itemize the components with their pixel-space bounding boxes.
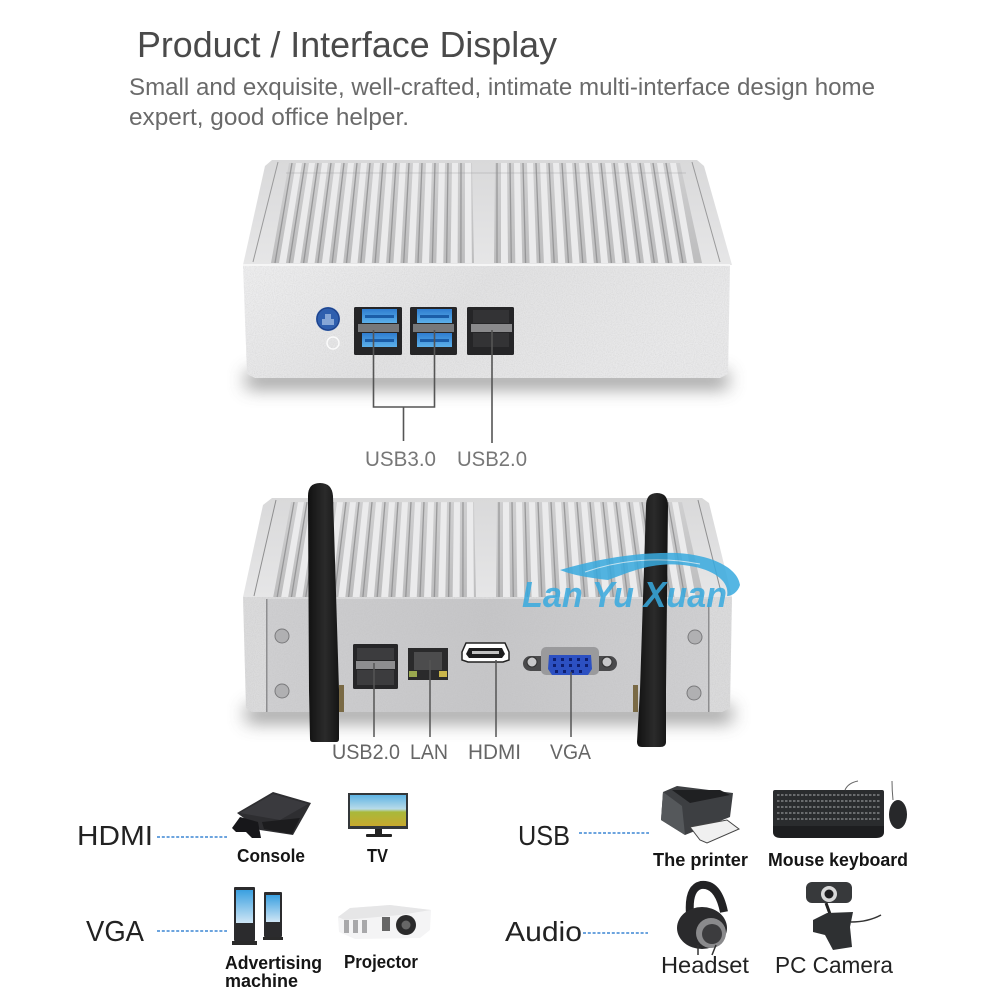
label: Projector: Projector — [344, 952, 418, 972]
icon: printer — [661, 786, 739, 843]
top heat-sink surface — [243, 498, 732, 598]
heading: Audio: Audio — [505, 916, 582, 947]
title: Product / Interface Display — [137, 24, 557, 65]
USB2.0 leader line — [491, 330, 493, 443]
label: Advertising machine: machine — [225, 971, 298, 991]
panel: USB devices — [518, 781, 908, 870]
panel: front view of mini PC — [243, 160, 733, 471]
USB 3.0 port stack B — [410, 307, 457, 355]
LAN port — [408, 648, 448, 680]
VGA port — [523, 647, 617, 675]
panel screws — [275, 629, 702, 700]
icon: game console — [232, 792, 311, 838]
dotted connector — [157, 836, 227, 838]
left antenna — [308, 483, 344, 742]
label: Mouse keyboard: Mouse keyboard — [768, 850, 908, 870]
heading: HDMI: HDMI — [77, 820, 153, 851]
label: VGA: VGA — [550, 741, 591, 764]
USB 2.0 port stack — [353, 644, 398, 689]
USB 2.0 port stack — [467, 307, 514, 355]
right antenna — [633, 493, 668, 747]
rear panel — [243, 597, 733, 713]
label: Advertising machine: Advertising — [225, 953, 322, 973]
subtitle text block: Small and exquisite, well-crafted, intimate multi-interface design home — [129, 74, 875, 101]
dotted connector — [579, 832, 649, 834]
front face — [243, 264, 733, 379]
icon: advertising machines — [232, 887, 283, 945]
dotted connector — [583, 932, 648, 934]
icon: projector — [338, 905, 431, 939]
panel: rear view of mini PC — [243, 483, 740, 764]
panel: Audio devices — [505, 882, 893, 978]
heading: VGA: VGA — [86, 916, 145, 948]
label: Advertising machine — [225, 953, 322, 991]
device shadow — [246, 706, 732, 722]
icon: headset — [677, 885, 727, 955]
label: Console: Console — [237, 846, 305, 866]
label: HDMI: HDMI — [468, 741, 521, 764]
dotted connector — [157, 930, 227, 932]
icon: keyboard and mouse — [773, 781, 907, 838]
leader lines to rear ports — [374, 660, 571, 737]
icon: PC camera — [806, 882, 881, 950]
panel: VGA devices — [86, 887, 431, 991]
heading: USB: USB — [518, 820, 570, 851]
top heat-sink surface — [243, 160, 732, 265]
USB 3.0 port stack A — [354, 307, 402, 355]
watermark logo — [522, 553, 740, 615]
label: USB2.0: USB2.0 — [457, 448, 527, 471]
HDMI port — [462, 643, 509, 662]
label: PC Camera: PC Camera — [775, 952, 893, 978]
device shadow — [246, 372, 728, 388]
label: USB2.0: USB2.0 — [332, 741, 400, 764]
label: The printer: The printer — [653, 850, 748, 870]
label: Headset: Headset — [661, 952, 750, 978]
USB3.0 bracket arrow — [374, 330, 434, 441]
panel: HDMI devices — [77, 792, 408, 866]
subtitle text block: expert, good office helper. — [129, 104, 409, 131]
label: TV: TV — [367, 846, 388, 866]
icon: power button — [316, 307, 340, 349]
label: LAN: LAN — [410, 741, 448, 764]
subtitle text block — [129, 74, 875, 131]
watermark logo: Lan Yu Xuan — [522, 574, 727, 615]
icon: TV — [348, 793, 408, 837]
label: USB3.0: USB3.0 — [365, 448, 436, 471]
